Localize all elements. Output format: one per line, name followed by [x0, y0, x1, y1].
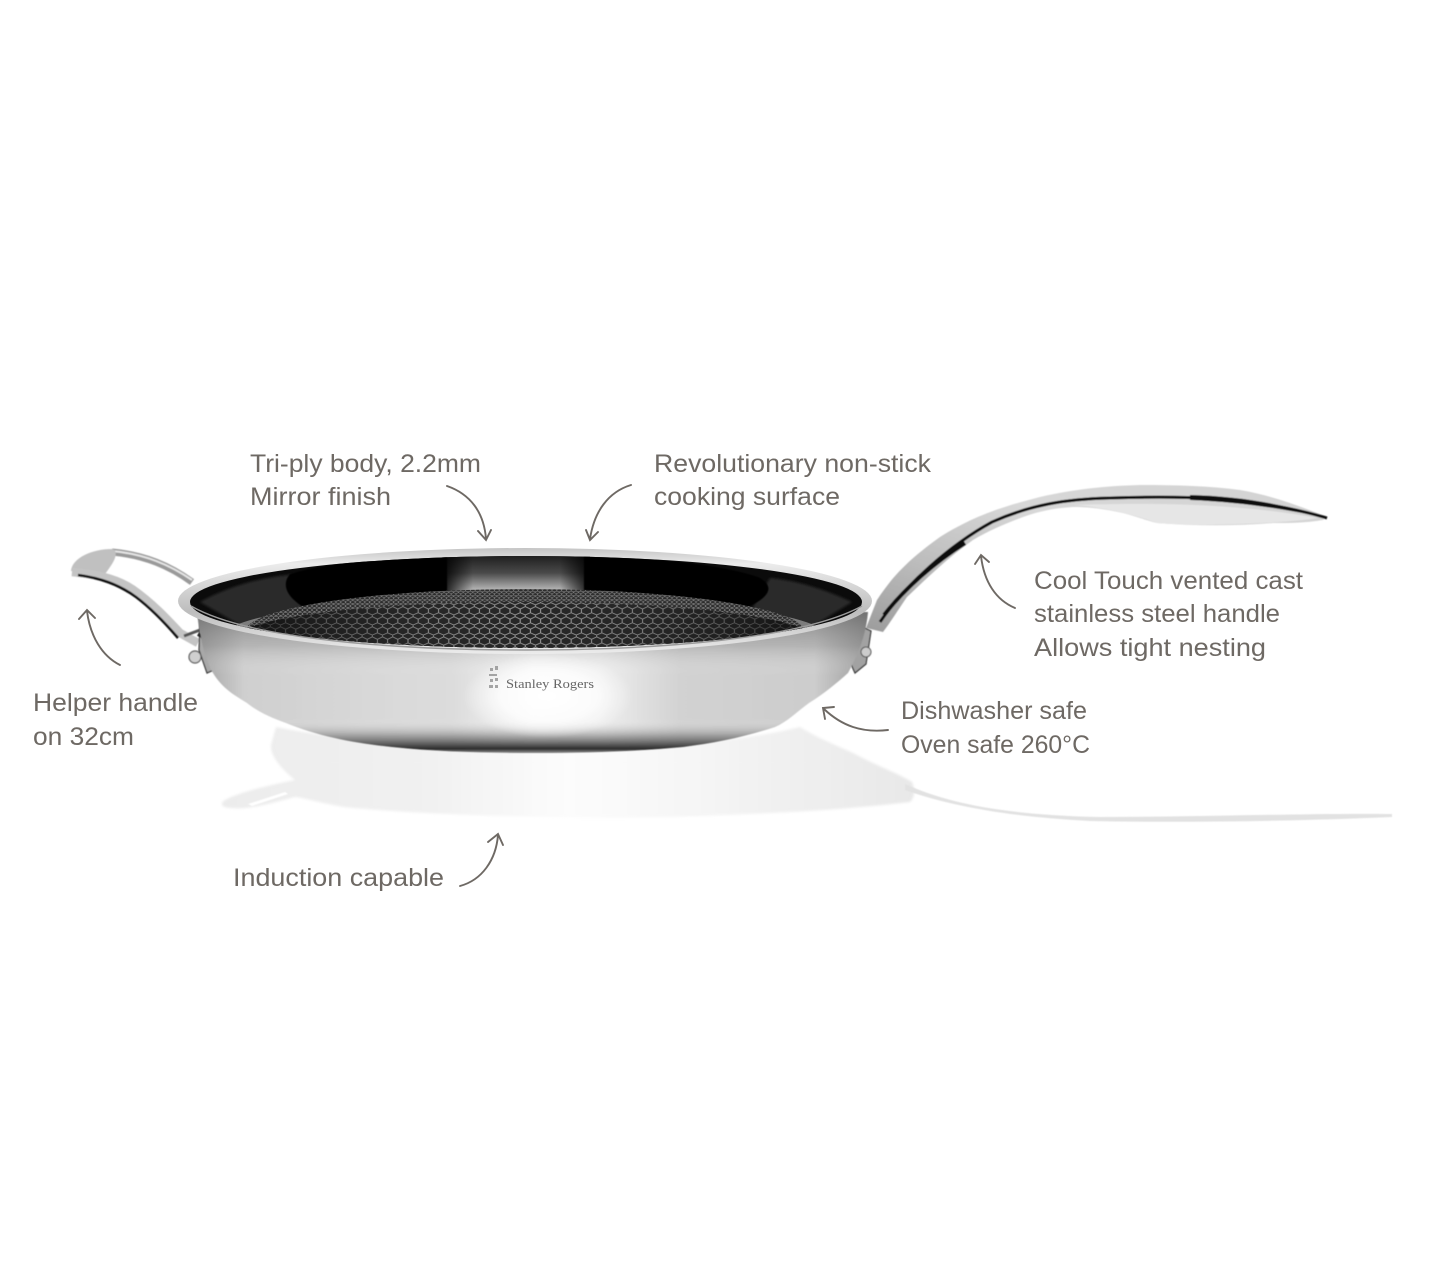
fine hexagon band — [248, 589, 804, 648]
label: helper handle: Helper handle — [33, 689, 198, 717]
label: helper handle — [33, 689, 198, 751]
label: cool touch handle: Cool Touch vented cast — [1034, 567, 1303, 595]
label: tri-ply body — [250, 450, 481, 511]
label: cooking surface — [654, 450, 932, 511]
label: cool touch handle — [1034, 567, 1303, 662]
label: cool touch handle: Allows tight nesting — [1034, 634, 1266, 662]
grey ring around cooking floor — [236, 616, 814, 648]
pan rim — [178, 548, 872, 654]
label: tri-ply body: Mirror finish — [250, 483, 391, 511]
pan interior — [190, 556, 862, 648]
arrow: dishwasher safe — [823, 707, 888, 731]
arrow: tri-ply body — [447, 486, 491, 540]
handle reflection — [905, 784, 1392, 822]
label: cooking surface: Revolutionary non-stick — [654, 450, 932, 478]
dark wall reflections — [286, 557, 448, 606]
brand logo — [489, 666, 594, 691]
arrow: cooking surface — [586, 485, 631, 540]
label: dishwasher and oven safe — [901, 697, 1090, 759]
label: tri-ply body: Tri-ply body, 2.2mm — [250, 450, 481, 478]
arrow: helper handle — [79, 610, 120, 665]
main handle — [850, 485, 1327, 673]
label: induction capable: Induction capable — [233, 864, 444, 892]
arrow: induction capable — [460, 834, 503, 886]
label: dishwasher and oven safe: Oven safe 260°C — [901, 731, 1090, 759]
label: cool touch handle: stainless steel handle — [1034, 600, 1280, 628]
pan body — [197, 612, 868, 753]
label: helper handle: on 32cm — [33, 723, 134, 751]
pan reflection — [222, 727, 1392, 822]
label: cooking surface: cooking surface — [654, 483, 840, 511]
centre wall highlight — [442, 556, 590, 591]
brand logo: Stanley Rogers — [506, 677, 594, 691]
rim front edge — [191, 606, 862, 650]
label: dishwasher and oven safe: Dishwasher safe — [901, 697, 1087, 725]
arrow: cool touch handle — [975, 555, 1015, 608]
non-stick hexagon surface — [249, 602, 802, 648]
helper handle — [71, 549, 218, 673]
